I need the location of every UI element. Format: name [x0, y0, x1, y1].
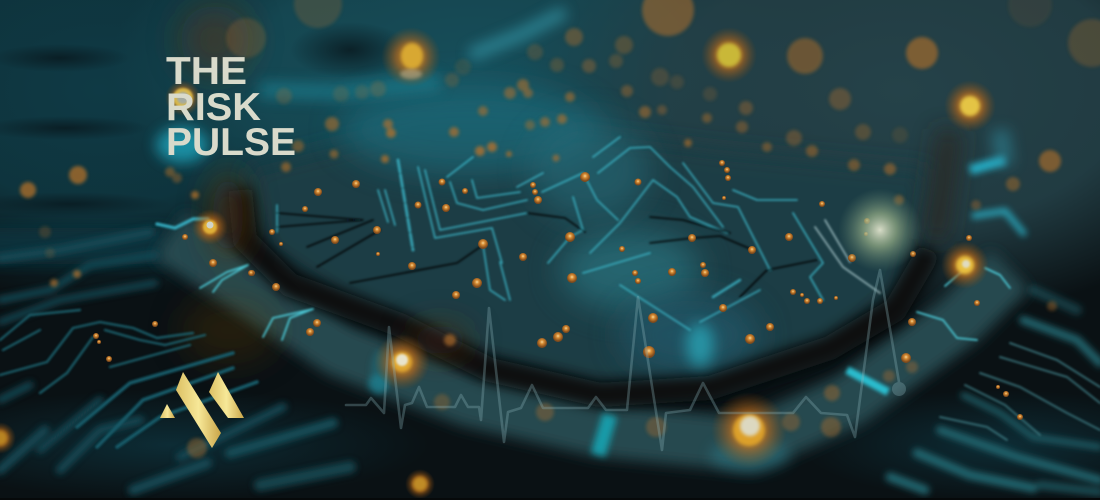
brown tint [180, 5, 470, 365]
circuit traces: lower right corner [890, 290, 1100, 492]
title [166, 50, 296, 164]
dim upper ring [935, 130, 950, 240]
teal strip under the left haze [0, 228, 170, 264]
shield face [245, 130, 930, 390]
heartbeat line [346, 270, 906, 450]
title: PULSE [166, 121, 296, 164]
circuit traces: lower left corner [0, 232, 350, 490]
title: RISK [166, 86, 261, 129]
cyan highlights [156, 12, 1025, 471]
logo [160, 372, 244, 448]
circuit traces: centre board [277, 137, 880, 330]
title: THE [166, 50, 247, 93]
bottom edge [0, 498, 1100, 500]
circuit solder dots [93, 160, 1023, 420]
outer ring band [170, 235, 1010, 445]
cyan ring accents [157, 219, 1010, 340]
dark smudges in haze [0, 22, 410, 216]
dark inner ring [240, 190, 930, 395]
